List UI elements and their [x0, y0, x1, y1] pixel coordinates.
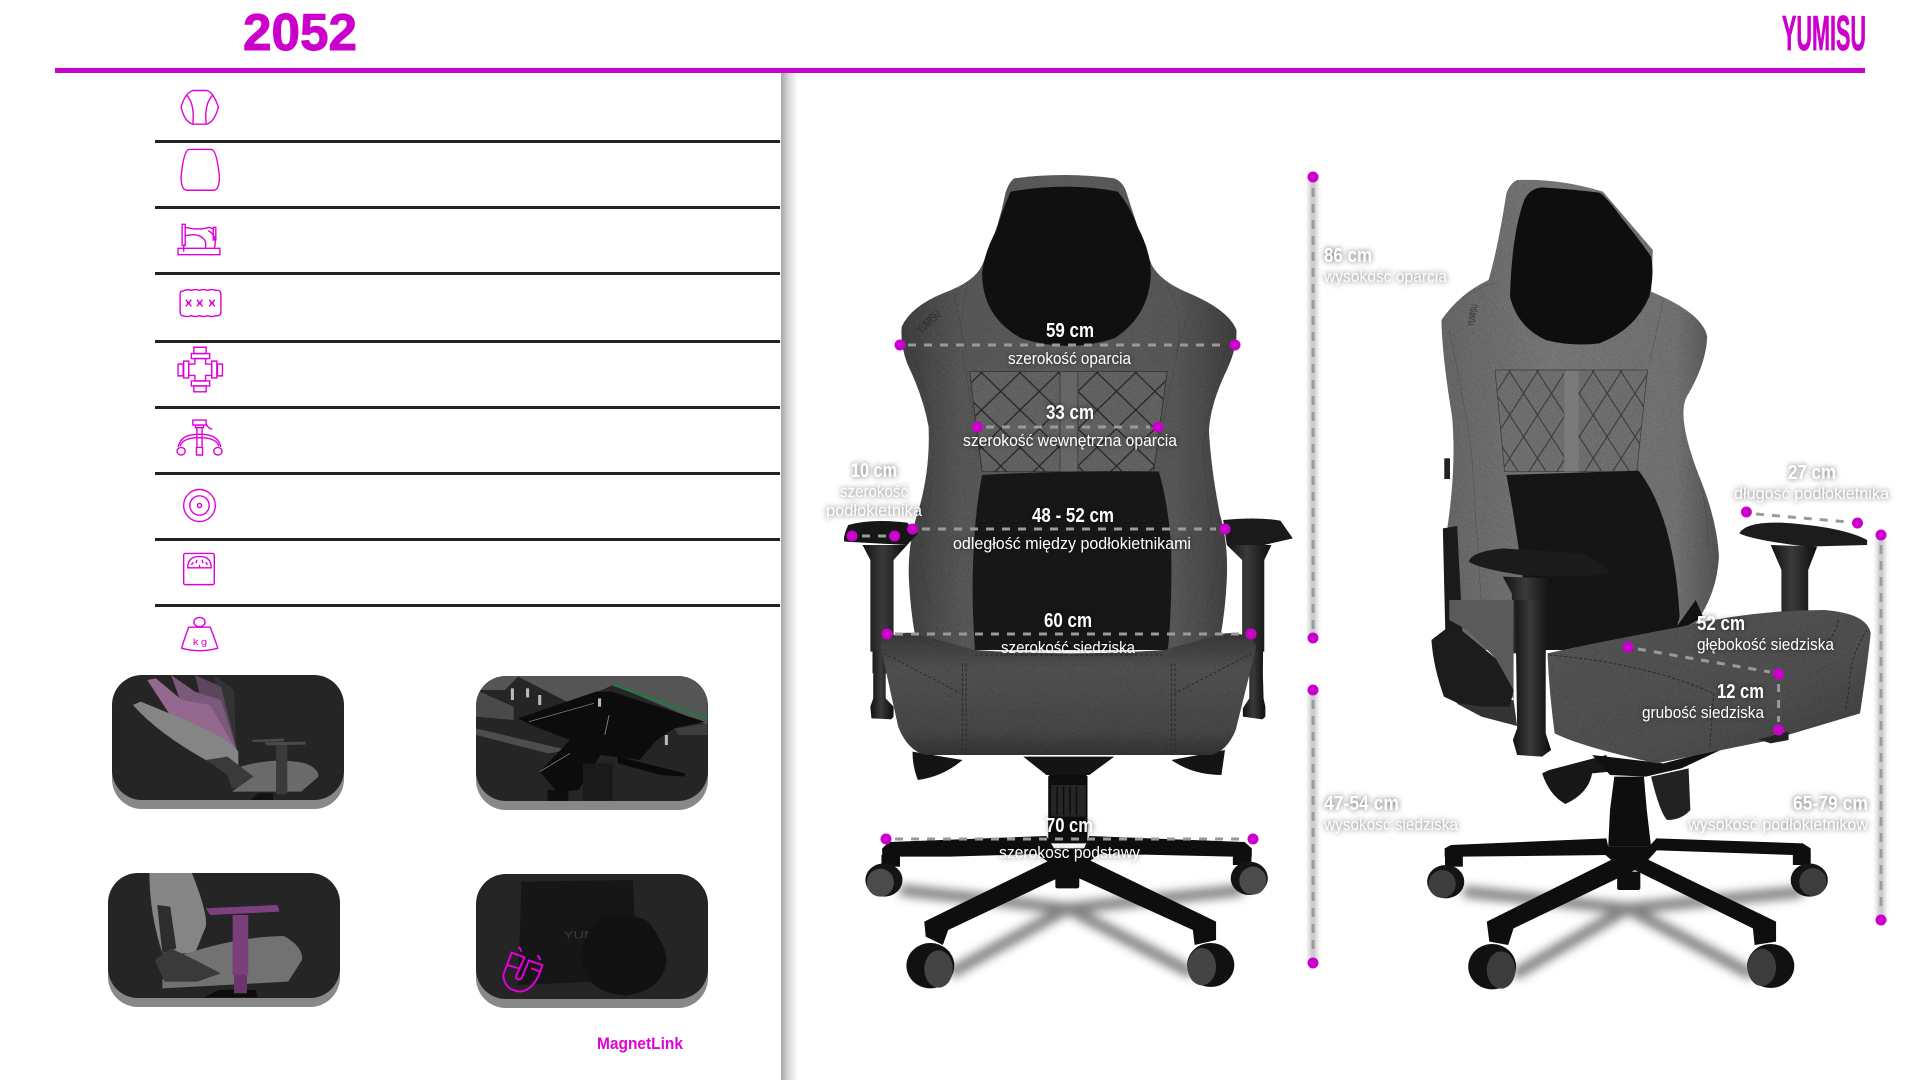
lumbar cushion — [973, 471, 1171, 650]
arm lower posts — [870, 600, 894, 719]
front view chair photo: YUMISU — [913, 308, 944, 336]
caption: MagnetLink: MagnetLink — [597, 1034, 683, 1053]
label: armrest width: podłokietnika — [826, 501, 923, 520]
base — [881, 775, 1252, 945]
lumbar cushion — [1506, 471, 1680, 650]
title: model number: 2052 — [243, 4, 357, 62]
floor shadow — [1464, 892, 1803, 975]
feature icon column — [177, 90, 222, 651]
label: armrest length — [1734, 462, 1890, 503]
icon: caster wheel — [184, 490, 215, 521]
lower backrest fabric — [1449, 600, 1514, 700]
measurement guide lines — [862, 177, 1881, 963]
label: distance between armrests: odległość między podłokietnikami — [953, 534, 1191, 553]
seat mechanism — [1592, 747, 1728, 777]
label: inner backrest width — [963, 402, 1177, 450]
backrest shell — [901, 175, 1237, 650]
seat mechanism — [912, 750, 1225, 780]
icon: backrest — [181, 149, 219, 190]
near arm post — [1503, 577, 1553, 653]
label: seat height: wysokość siedziska — [1323, 815, 1458, 834]
label: seat depth: 52 cm — [1697, 613, 1745, 635]
base — [1445, 777, 1811, 945]
label: backrest width: szerokość oparcia — [1008, 349, 1131, 368]
label: armrest width: 10 cm — [851, 460, 897, 482]
tilt lever and knob — [1542, 755, 1610, 804]
photo card: MagnetLink cushions — [476, 874, 708, 1008]
side view chair photo — [1427, 180, 1871, 989]
casters — [865, 862, 1268, 988]
front view chair photo — [844, 175, 1293, 988]
icon: kg weight — [182, 617, 218, 651]
floor shadow — [900, 890, 1243, 973]
label: seat depth — [1697, 613, 1834, 654]
icon: chair base — [177, 420, 222, 455]
label: base width — [999, 815, 1140, 862]
label: seat width: 60 cm — [1044, 610, 1092, 632]
seat cushion — [880, 633, 1256, 755]
label: seat thickness: grubość siedziska — [1642, 703, 1764, 722]
label: armrest width — [826, 460, 923, 520]
label: seat thickness: 12 cm — [1717, 681, 1764, 703]
headrest — [1510, 187, 1652, 344]
label: backrest height: 86 cm — [1324, 245, 1372, 267]
label: seat depth: głębokość siedziska — [1697, 635, 1834, 654]
label: backrest width — [1008, 320, 1131, 368]
label: armrest width: szerokość — [840, 482, 908, 501]
label: backrest height — [1323, 245, 1447, 286]
icon: weight scale — [184, 553, 214, 585]
measurement dots — [846, 172, 1886, 968]
quilted panel — [970, 372, 1167, 472]
armrest pads — [844, 521, 918, 545]
near armrest pad — [1469, 548, 1610, 577]
stitching — [907, 283, 1230, 617]
label: base width: 70 cm — [1046, 815, 1093, 837]
quilted panel — [1495, 370, 1647, 472]
far arm post — [1771, 545, 1817, 623]
near arm post lower — [1513, 600, 1551, 757]
icon: kg weight: k g — [193, 638, 207, 648]
recline block — [1431, 623, 1514, 707]
label: backrest height: wysokość oparcia — [1323, 267, 1447, 286]
icon: magnet — [503, 947, 542, 992]
label: seat thickness — [1642, 681, 1764, 722]
label: armrest length: 27 cm — [1788, 462, 1836, 484]
label: armrest height: 65-79 cm — [1793, 793, 1868, 815]
photo card: adjustable armrest — [108, 873, 340, 1007]
label: inner backrest width: 33 cm — [1046, 402, 1094, 424]
label: base width: szerokość podstawy — [999, 843, 1140, 862]
icon: mechanism — [178, 347, 222, 392]
label: seat width — [1001, 610, 1135, 657]
icon: sewing machine — [178, 224, 220, 255]
headrest — [982, 187, 1151, 346]
icon: lumbar cushion — [181, 90, 218, 124]
backrest shell — [1441, 180, 1719, 650]
photo card: MagnetLink cushions: YUMISU — [564, 928, 621, 941]
side bracket — [1443, 526, 1464, 650]
dimension labels — [826, 245, 1890, 862]
photo card: reclining backrest — [112, 675, 344, 809]
label: seat width: szerokość siedziska — [1001, 638, 1135, 657]
arm posts — [862, 545, 907, 652]
casters — [1427, 863, 1828, 989]
side view chair photo: YUMISU — [1465, 304, 1480, 327]
seat cushion — [1547, 610, 1871, 763]
label: distance between armrests: 48 - 52 cm — [1032, 505, 1114, 527]
far armrest pad — [1739, 523, 1867, 547]
photo card: tilt mechanism — [476, 676, 708, 810]
label: seat height: 47-54 cm — [1324, 793, 1399, 815]
icon: foam padding — [180, 290, 221, 317]
label: armrest height: wysokość podłokietników — [1687, 815, 1869, 834]
label: distance between armrests — [953, 505, 1191, 553]
label: backrest width: 59 cm — [1046, 320, 1094, 342]
label: armrest height — [1687, 793, 1869, 834]
label: seat height — [1323, 793, 1458, 834]
label: armrest length: długość podłokietnika — [1734, 484, 1890, 503]
label: inner backrest width: szerokość wewnętrzna oparcia — [963, 431, 1177, 450]
